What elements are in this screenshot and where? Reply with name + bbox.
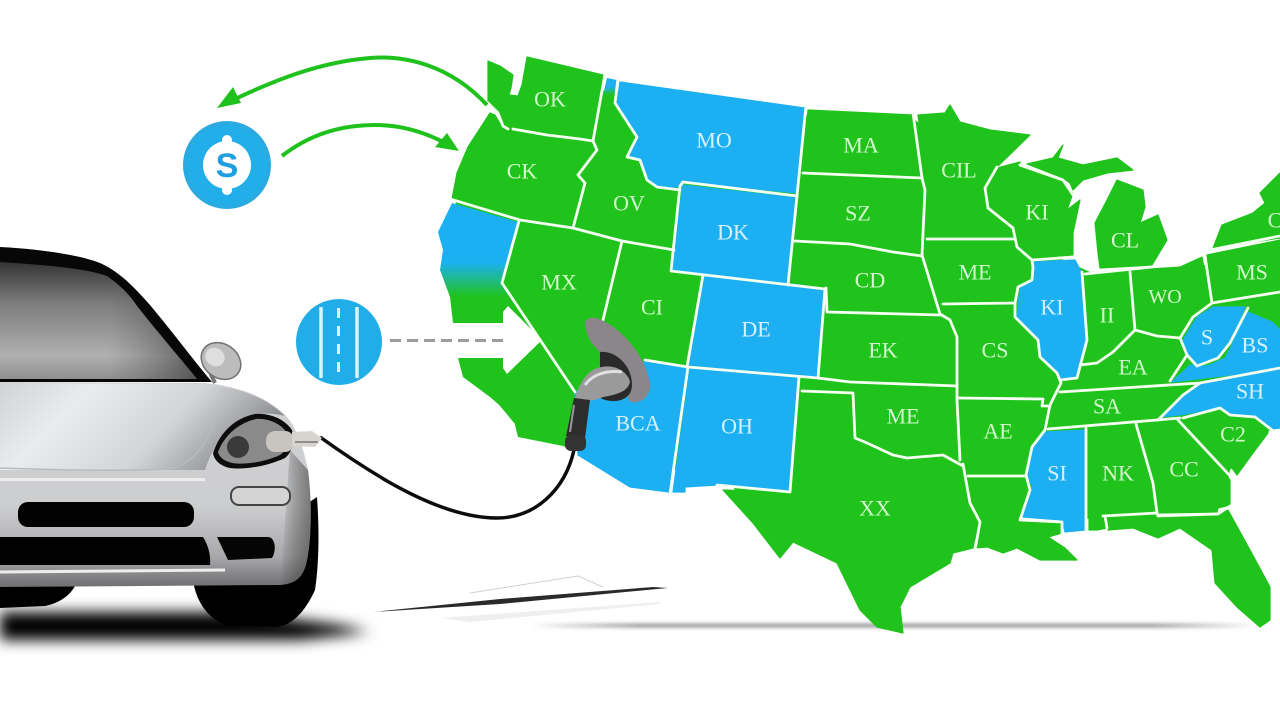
arrow: dollar icon to map [282,125,459,156]
car headlamp [213,414,293,469]
state: MS [1023,430,1085,532]
state: SC [1183,410,1268,475]
state: AL [1089,425,1155,530]
car upper grille [18,502,194,527]
icon: dollar coin: S [216,147,238,185]
state: WA: OK [534,86,566,112]
state: MN: CIL [941,158,977,182]
state: NE: CD [855,268,885,292]
state: KY: EA [1118,354,1148,380]
state: AL: NK [1102,460,1134,486]
state: TN [1050,383,1200,427]
car hood [0,383,285,470]
arrow: map to dollar icon [217,58,487,108]
state: MS: SI [1047,460,1067,486]
state: WY [671,185,797,285]
car windshield [0,262,197,379]
state: NM: OH [721,414,753,438]
car wheels [0,497,318,627]
state: SD: SZ [845,200,871,226]
car lower grille [0,537,210,565]
state: NY [1213,173,1280,248]
state: AZ [575,362,687,492]
state: OH [1133,257,1210,338]
road streak on the ground [373,576,668,622]
state: IN [1083,273,1135,362]
state: ND: MA [843,132,879,158]
state: CO: DE [741,316,771,342]
state: MT [617,82,805,193]
state: NC: SH [1236,378,1264,404]
state: SD [795,175,925,253]
state: WI [987,162,1080,258]
state: IA: ME [958,260,992,284]
state: OH: WO [1148,286,1182,308]
state: TX [723,393,978,633]
ground shadow under map [530,623,1260,628]
map underlay [445,90,1280,590]
state: TX: XX [859,496,891,520]
state: IA [925,241,1033,303]
state: GA: CC [1169,456,1199,482]
state: FL [1107,510,1270,627]
state: IL: KI [1040,294,1064,320]
state: NM [673,367,799,492]
state: WV [1183,307,1245,365]
state borders [450,74,1280,550]
state: NV [502,222,621,392]
car mirror [194,335,248,387]
state: AZ: BCA [615,410,661,436]
state: PA: MS [1236,260,1268,284]
car side intake [217,537,275,560]
state: KS [822,312,957,385]
car bumper line [0,570,225,572]
arrow: white arrow into the map [430,306,542,374]
state: WY: DK [717,220,749,244]
state: WV: S [1201,324,1213,350]
state: OK: ME [886,404,920,428]
state: MI upper [1027,145,1133,190]
state: VA: BS [1242,332,1268,358]
car [0,247,370,640]
state: WA [488,57,603,137]
car charging port plug [266,431,322,452]
car side lamp [231,487,290,505]
car roof band [0,247,212,382]
state: NE [790,243,940,313]
state: TN: SA [1093,394,1121,418]
icon: dollar coin [183,121,271,209]
state: AR: AE [983,418,1013,444]
state: WI: KI [1025,200,1049,224]
state: VA [1172,312,1280,382]
state: MT: MO [696,128,732,152]
state: MI lower [1095,180,1167,268]
state: OK [802,383,960,460]
state: KS: EK [868,338,898,362]
state: IL [1017,260,1087,378]
state: PA [1207,240,1280,303]
state: KY [1065,333,1185,387]
state: CA [438,203,575,450]
car body [0,382,311,587]
state: SC: C2 [1220,422,1246,446]
state: NC [1160,368,1280,429]
car side shading [280,450,311,585]
state: MO [945,305,1060,403]
state: CO [689,274,825,377]
state: ID [577,78,678,248]
state: ID: OV [613,190,645,216]
car floor shadow [0,612,370,640]
state: OR [452,113,597,228]
state: ND [803,110,922,177]
charger plug [565,318,650,451]
state: LA [972,478,1077,560]
state: MN [918,105,1030,237]
state: NV: MX [541,270,577,294]
state: UT [600,243,701,365]
state: IN: II [1100,302,1114,328]
state: OR: CK [507,158,537,184]
state: UT: CI [641,294,663,320]
state: MI lower: CL [1111,228,1139,252]
charging cable [320,437,574,518]
state: AR [962,400,1050,475]
state: GA [1138,422,1230,513]
icon: road [296,299,382,385]
United States map [438,57,1280,633]
dashed connector from road icon [390,339,507,342]
state: MO: CS [982,338,1008,362]
